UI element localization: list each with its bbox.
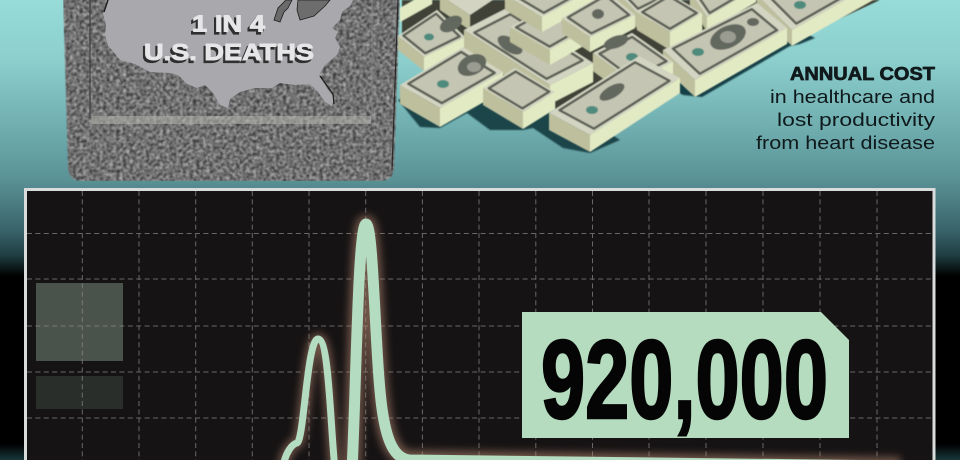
text block: annual cost: from heart disease (756, 133, 935, 153)
callout: 920,000: 920,000 (541, 318, 828, 442)
long bundle with portrait, right (663, 3, 787, 97)
monitor screen (26, 190, 934, 460)
tombstone stone slab (63, 0, 400, 181)
top bundle, right of stack (607, 0, 680, 28)
cash pile bundles (398, 0, 880, 152)
tombstone inner frame (90, 0, 398, 170)
small bundle with seal (562, 0, 635, 52)
long bundle, centre left (464, 8, 593, 104)
ECG trace glow (283, 224, 900, 460)
top bundle, centre (505, 0, 600, 32)
panel: ECG monitor (26, 190, 934, 460)
text: 1 in 4 U.S. deaths: 1 IN 4 (190, 13, 263, 39)
cash pile shadow (398, 25, 815, 153)
text: 1 in 4 U.S. deaths: 1 IN 4 (192, 10, 265, 36)
text block: annual cost (756, 64, 935, 153)
illustration: pile of cash bundles (398, 0, 880, 153)
text: 1 in 4 U.S. deaths: U.S. DEATHS (142, 42, 312, 68)
map: contiguous United States (103, 0, 353, 108)
text: 1 in 4 U.S. deaths: U.S. DEATHS (144, 39, 314, 65)
text block: annual cost: ANNUAL COST (790, 64, 935, 84)
bundle with portrait, far left (398, 10, 465, 71)
small bundle, lower middle (483, 68, 555, 129)
ECG trace (283, 224, 900, 460)
bundle, far right edge (757, 0, 880, 46)
front bundle with portrait (549, 56, 680, 152)
monitor status block, large (36, 283, 123, 361)
panel: tombstone with U.S. map (63, 0, 400, 181)
bundle with seal, centre right (593, 32, 673, 100)
bundle with portrait, lower left (400, 47, 503, 127)
text block: annual cost: in healthcare and (770, 87, 935, 107)
top bundle, right (690, 0, 756, 31)
text: 1 in 4 U.S. deaths (142, 10, 314, 68)
text block: annual cost: lost productivity (777, 110, 935, 130)
small bundle, mid right (637, 0, 702, 50)
monitor status block, small (36, 376, 123, 409)
stacked bundle, centre (510, 8, 585, 65)
